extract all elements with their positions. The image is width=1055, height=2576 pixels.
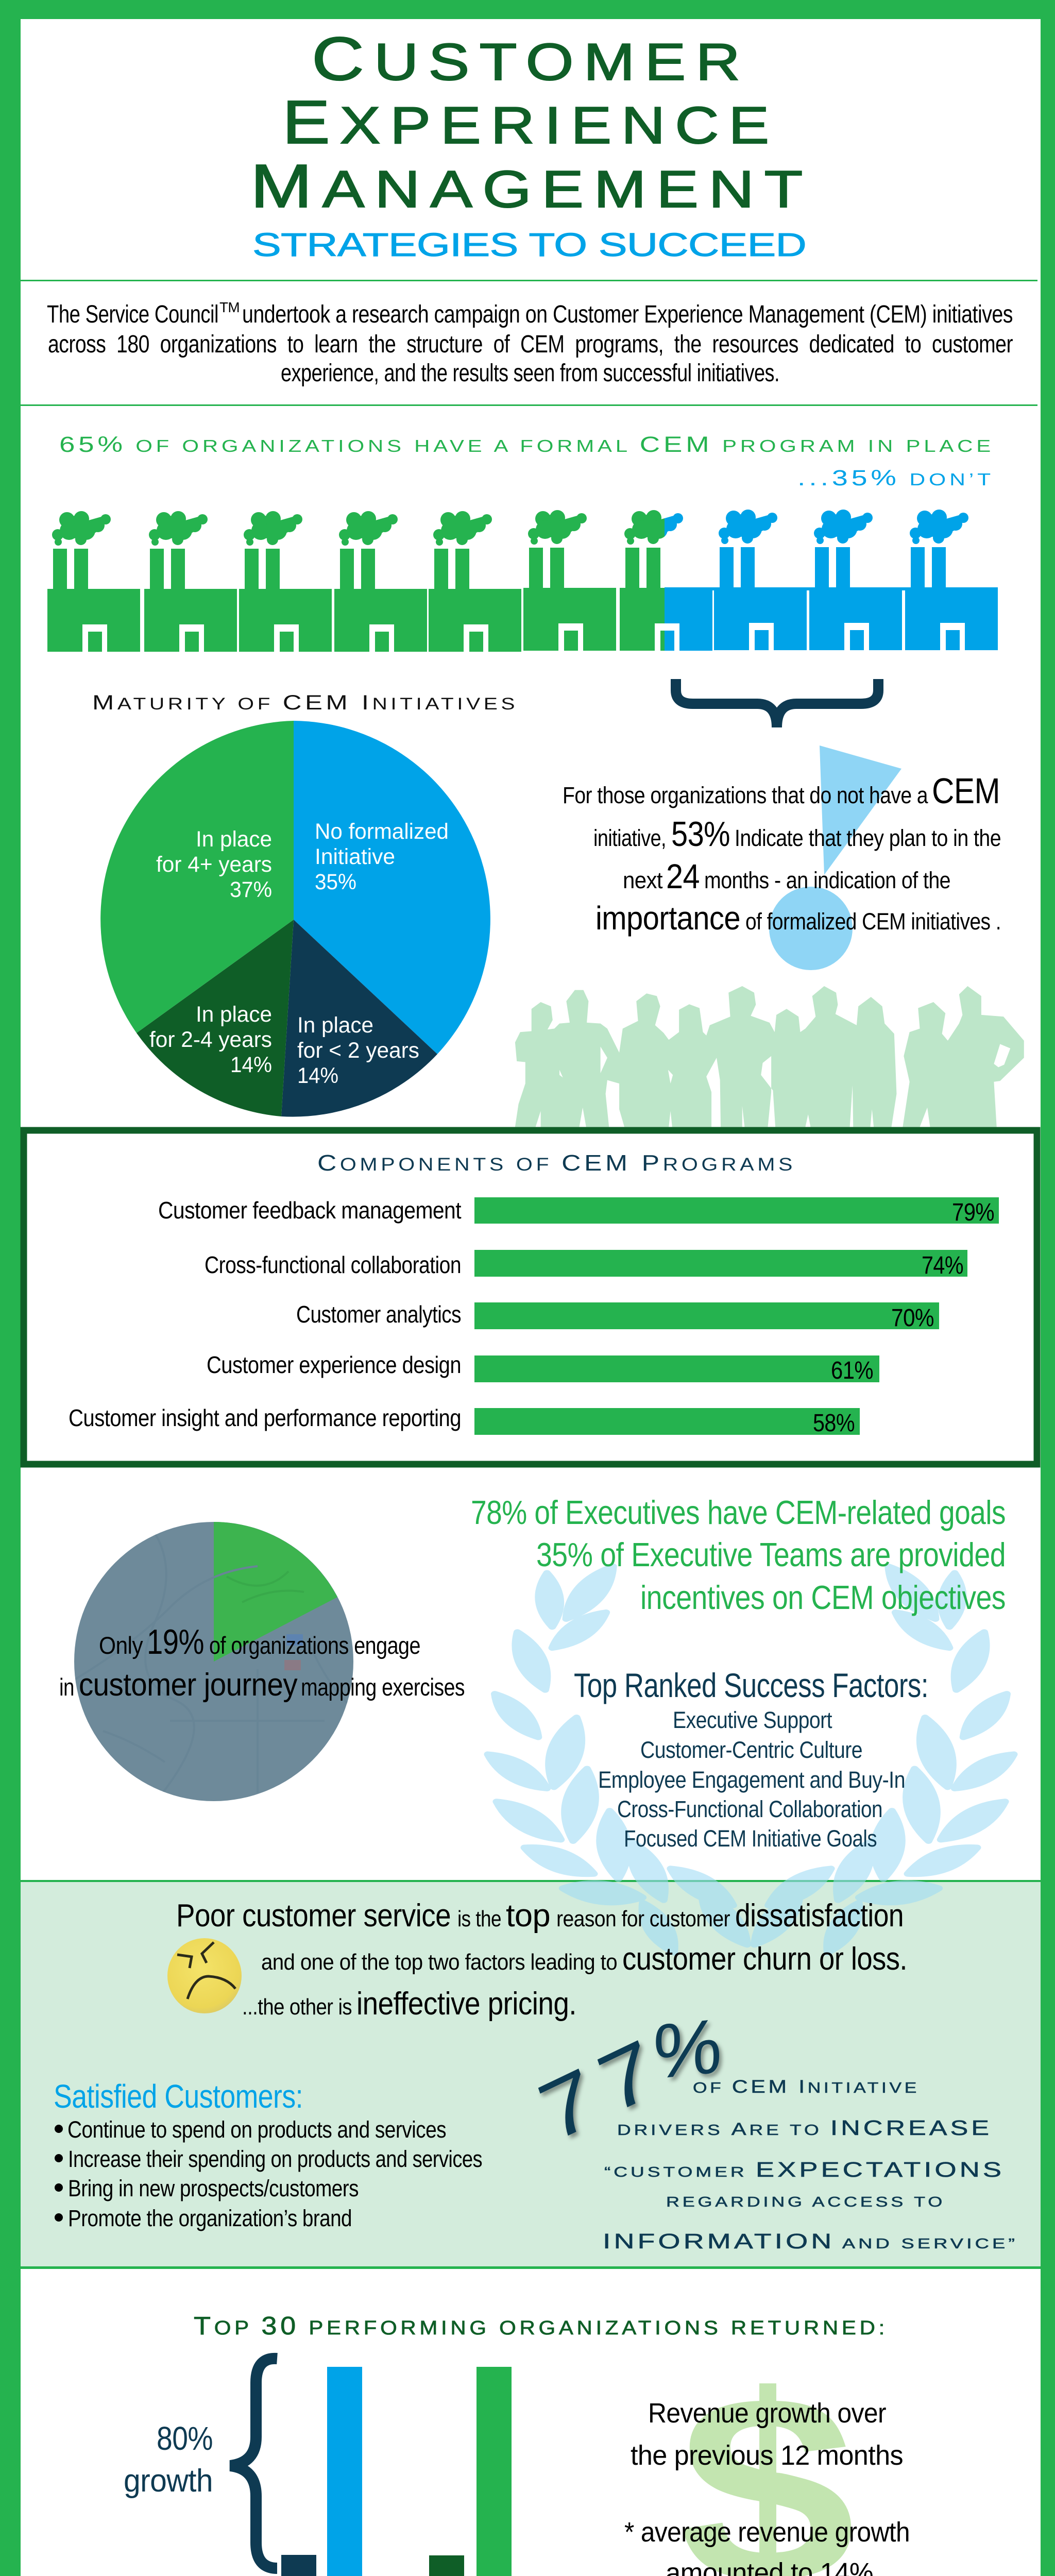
bar: customer experience design (207, 1351, 879, 1384)
list: satisfied customers: Continue to spend on products and services (67, 2116, 446, 2143)
label: in place 2-4 years (149, 1002, 272, 1077)
text: poor customer service: ineffective pricing. (356, 1986, 576, 2022)
bar: customer analytics (296, 1301, 939, 1332)
text: poor customer service: top (506, 1898, 550, 1934)
title: MANAGEMENT (250, 152, 813, 221)
bar: cross-functional collaboration (205, 1250, 967, 1279)
list: success factors: Executive Support (673, 1707, 832, 1733)
stat: 77%: 7 (587, 2022, 667, 2131)
panel: components of CEM programs (24, 1130, 1037, 1464)
intro text: The Service Council (47, 301, 218, 328)
label: in place 4+ years: In place (196, 827, 272, 852)
label: only 19%: 19% (147, 1622, 204, 1662)
pie chart: maturity (100, 721, 490, 1117)
text: poor customer service: and one of the top two factors leading to (261, 1950, 617, 1975)
band: mint background (21, 1880, 1041, 2269)
list: satisfied customers: Bring in new prospects/customers (68, 2175, 359, 2201)
bar: customer analytics: Customer analytics (296, 1301, 461, 1328)
callout: plan to adopt CEM: 53% (671, 815, 730, 854)
list: success factors: Customer-Centric Culture (640, 1737, 862, 1763)
callout: plan to adopt CEM: CEM (932, 771, 1000, 811)
label: only 19%: of organizations engage (209, 1632, 420, 1659)
label: no formalized initiative: Initiative (315, 844, 395, 869)
callout: plan to adopt CEM: For those organizations that do not have a (563, 782, 928, 808)
label: in place under 2 years: In place (297, 1013, 373, 1038)
list: success factors (598, 1707, 905, 1852)
text: revenue growth: * average revenue growth (624, 2517, 910, 2548)
label: in place 2-4 years: for 2-4 years (149, 1027, 272, 1052)
subtitle: STRATEGIES TO SUCCEED (252, 226, 806, 263)
intro text: experience, and the results seen from successful initiatives. (281, 360, 779, 387)
bar: customer feedback management: 79% (952, 1199, 994, 1226)
icon: tall curly brace (230, 2359, 277, 2568)
heading: 65% formal CEM program: 65% OF ORGANIZATIONS HAVE A FORMAL CEM PROGRAM IN PLACE (59, 432, 994, 457)
label: no formalized initiative: No formalized (315, 819, 449, 844)
callout: plan to adopt CEM (563, 771, 1001, 937)
list: success factors: Employee Engagement and Buy-In (598, 1767, 905, 1793)
bar: customer experience design: 61% (831, 1357, 873, 1384)
icon: curly brace (676, 679, 878, 727)
text: CEM initiative drivers: “CUSTOMER EXPECTATIONS (604, 2158, 1005, 2181)
stat: 77%: 7 (528, 2050, 607, 2160)
label: in place 4+ years (156, 827, 272, 902)
text: poor customer service: is the (457, 1906, 501, 1931)
intro text (47, 299, 1013, 387)
label: no formalized initiative (315, 819, 449, 894)
text: CEM initiative drivers: DRIVERS A RE TO INCREASE (617, 2116, 992, 2140)
title: EXPERIENCE (282, 88, 779, 157)
heading: components: COMPONENTS OF CEM P ROGRAMS (317, 1150, 796, 1176)
title: CUSTOMER (312, 25, 750, 93)
callout: plan to adopt CEM: months - an indication of the (704, 867, 950, 893)
list: success factors: Focused CEM Initiative Goals (624, 1825, 877, 1852)
text: poor customer service: reason for customer (556, 1906, 730, 1931)
text: poor customer service: ...the other is (242, 1994, 352, 2020)
label: 80% growth: 80% (157, 2420, 213, 2457)
bar: cross-functional collaboration: 74% (922, 1252, 963, 1279)
text: poor customer service: customer churn or loss. (622, 1941, 907, 1977)
bar: customer analytics: 70% (891, 1304, 934, 1332)
stat: 77% (528, 2002, 722, 2160)
text: CEM initiative drivers: INFORMATION AND SERVICE” (603, 2229, 1018, 2253)
factory pictogram row (47, 510, 998, 652)
heading: maturity of CEM initiatives: M ATURITY OF CEM I NITIATIVES (92, 691, 518, 714)
label: 80% growth (124, 2420, 213, 2499)
list: satisfied customers: Increase their spending on products and services (68, 2146, 482, 2172)
bar: customer feedback management: Customer feedback management (158, 1197, 462, 1224)
text: CEM initiative drivers: REGARDING ACCESS TO (666, 2194, 945, 2210)
label: in place 4+ years: for 4+ years (156, 852, 272, 877)
text: poor customer service (176, 1898, 907, 2022)
bar: customer experience design: Customer experience design (207, 1351, 461, 1378)
label: in place under 2 years: 14% (297, 1063, 338, 1088)
label: only 19% (59, 1622, 465, 1703)
heading: top ranked success factors: Top Ranked Success Factors: (574, 1666, 928, 1704)
icon: exclamation mark (769, 745, 901, 970)
executive goals text (471, 1494, 1006, 1616)
label: only 19%: customer journey (79, 1667, 298, 1703)
label: in place 2-4 years: In place (196, 1002, 272, 1027)
people silhouette (515, 986, 1024, 1127)
label: only 19%: in (59, 1673, 74, 1701)
label: only 19%: Only (99, 1632, 143, 1659)
icon: frowning face (167, 1938, 242, 2013)
label: 80% growth: growth (124, 2463, 213, 2499)
label: in place 4+ years: 37% (230, 877, 272, 902)
list: satisfied customers (55, 2116, 482, 2231)
text: revenue growth (624, 2398, 910, 2576)
callout: plan to adopt CEM: 24 (666, 857, 700, 896)
label: only 19%: mapping exercises (301, 1673, 465, 1701)
label: in place under 2 years: for < 2 years (297, 1038, 419, 1063)
callout: plan to adopt CEM: Indicate that they plan to in the (735, 825, 1001, 851)
callout: plan to adopt CEM: importance (595, 900, 740, 937)
label: no formalized initiative: 35% (315, 870, 356, 894)
text: poor customer service: dissatisfaction (735, 1898, 904, 1934)
callout: plan to adopt CEM: initiative, (593, 825, 666, 851)
list: success factors: Cross-Functional Collaboration (617, 1796, 882, 1822)
bar chart: growth (211, 2367, 538, 2576)
heading: 35% don't: ...35% DON’T (797, 466, 994, 490)
label: in place 2-4 years: 14% (230, 1053, 272, 1077)
heading: satisfied customers: Satisfied Customers: (54, 2078, 303, 2115)
text: CEM initiative drivers (603, 2077, 1018, 2253)
bar: customer insight and performance reporting (69, 1404, 860, 1437)
map texture (75, 1534, 347, 1792)
text: revenue growth: Revenue growth over (648, 2398, 887, 2429)
label: in place under 2 years (297, 1013, 419, 1088)
bar: customer feedback management (158, 1197, 999, 1226)
stat: 77%: % (653, 2002, 722, 2095)
callout: plan to adopt CEM: next (623, 867, 663, 893)
text: revenue growth: the previous 12 months (631, 2440, 903, 2471)
intro text: TM (219, 299, 240, 315)
callout: plan to adopt CEM: of formalized CEM initiatives . (745, 908, 1001, 935)
pie chart: customer journey mapping (59, 1522, 465, 1803)
heading: top 30 performing organizations: TOP 30 PERFORMING ORGANIZATIONS RETURNED: (194, 2312, 888, 2340)
text: poor customer service: Poor customer service (176, 1898, 451, 1934)
title (250, 25, 813, 221)
bar chart (69, 1197, 999, 1437)
bar: customer insight and performance reporting: Customer insight and performance reporting (69, 1404, 461, 1431)
bar: customer insight and performance reporting: 58% (813, 1410, 855, 1437)
text: CEM initiative drivers: OF CEM I NITIATIVE (693, 2077, 920, 2097)
list: satisfied customers: Promote the organization’s brand (68, 2205, 352, 2231)
bar: cross-functional collaboration: Cross-functional collaboration (205, 1251, 461, 1278)
icon: laurel wreath (488, 1566, 1014, 1953)
